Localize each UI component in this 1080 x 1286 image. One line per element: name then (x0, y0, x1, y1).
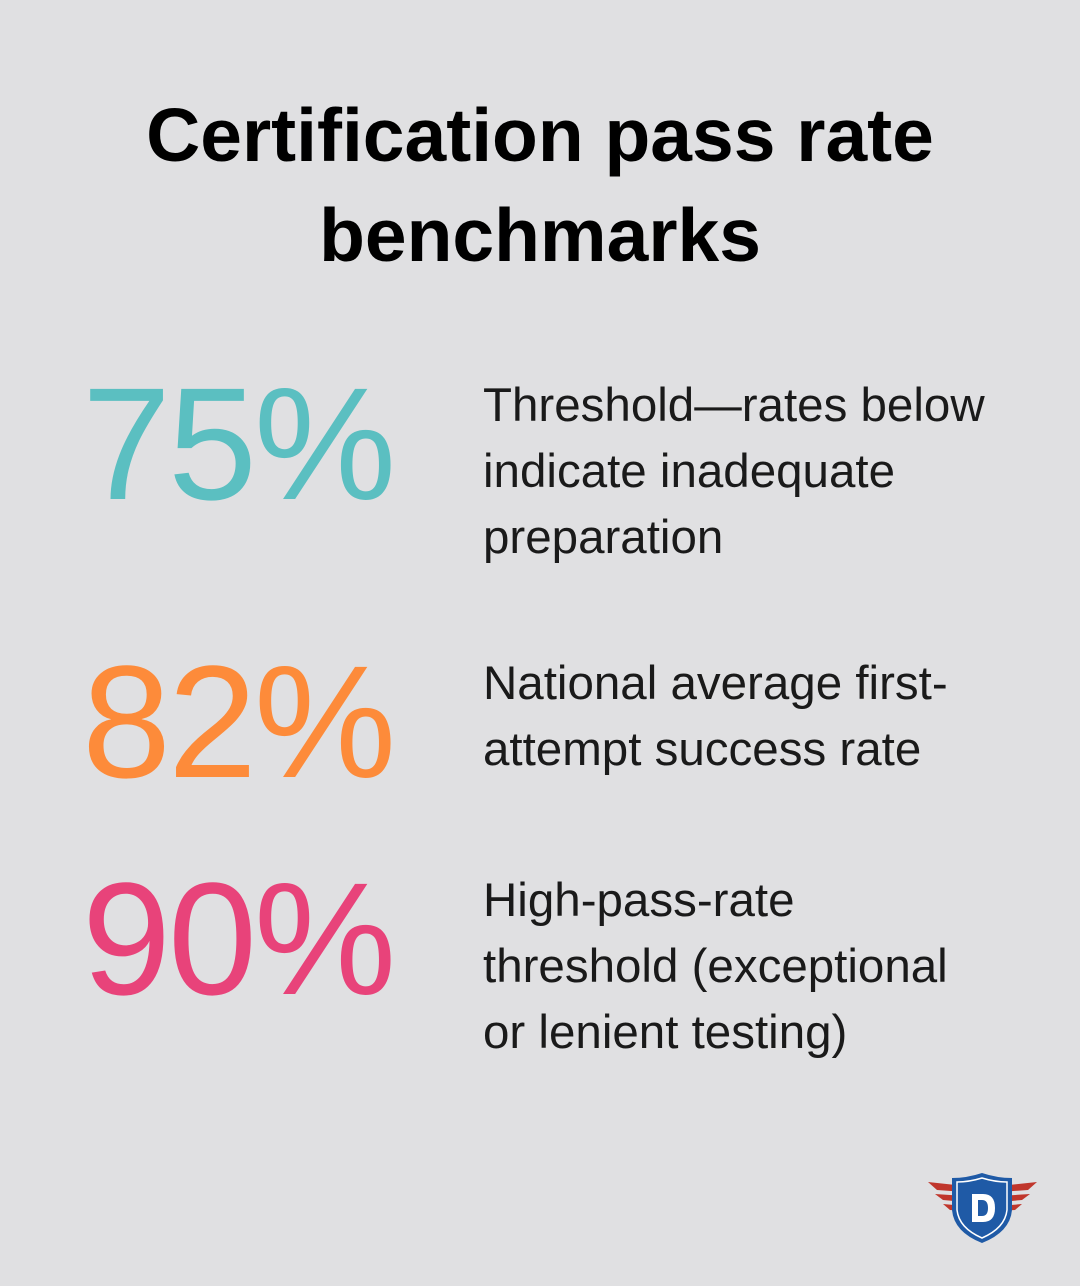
text: 75% description: Threshold—rates below (483, 379, 985, 432)
text: 82% description: attempt success rate (483, 723, 921, 776)
text: 82% description: National average first- (483, 657, 948, 710)
title: benchmarks (319, 193, 761, 277)
text: 75% description (483, 379, 985, 564)
text: 90% description: High-pass-rate (483, 874, 795, 927)
title (146, 93, 934, 277)
icon: logo shield with wings (928, 1173, 1037, 1243)
text: 82% description (483, 657, 948, 776)
text: 90% description: threshold (exceptional (483, 940, 948, 993)
text: 90% description: or lenient testing) (483, 1006, 847, 1059)
title: Certification pass rate (146, 93, 934, 177)
stat: 75%: 75% (82, 354, 393, 533)
text: 75% description: indicate inadequate (483, 445, 895, 498)
stat: 82%: 82% (82, 632, 393, 811)
stat: 90%: 90% (82, 849, 393, 1028)
text: 90% description (483, 874, 948, 1059)
text: 75% description: preparation (483, 511, 723, 564)
